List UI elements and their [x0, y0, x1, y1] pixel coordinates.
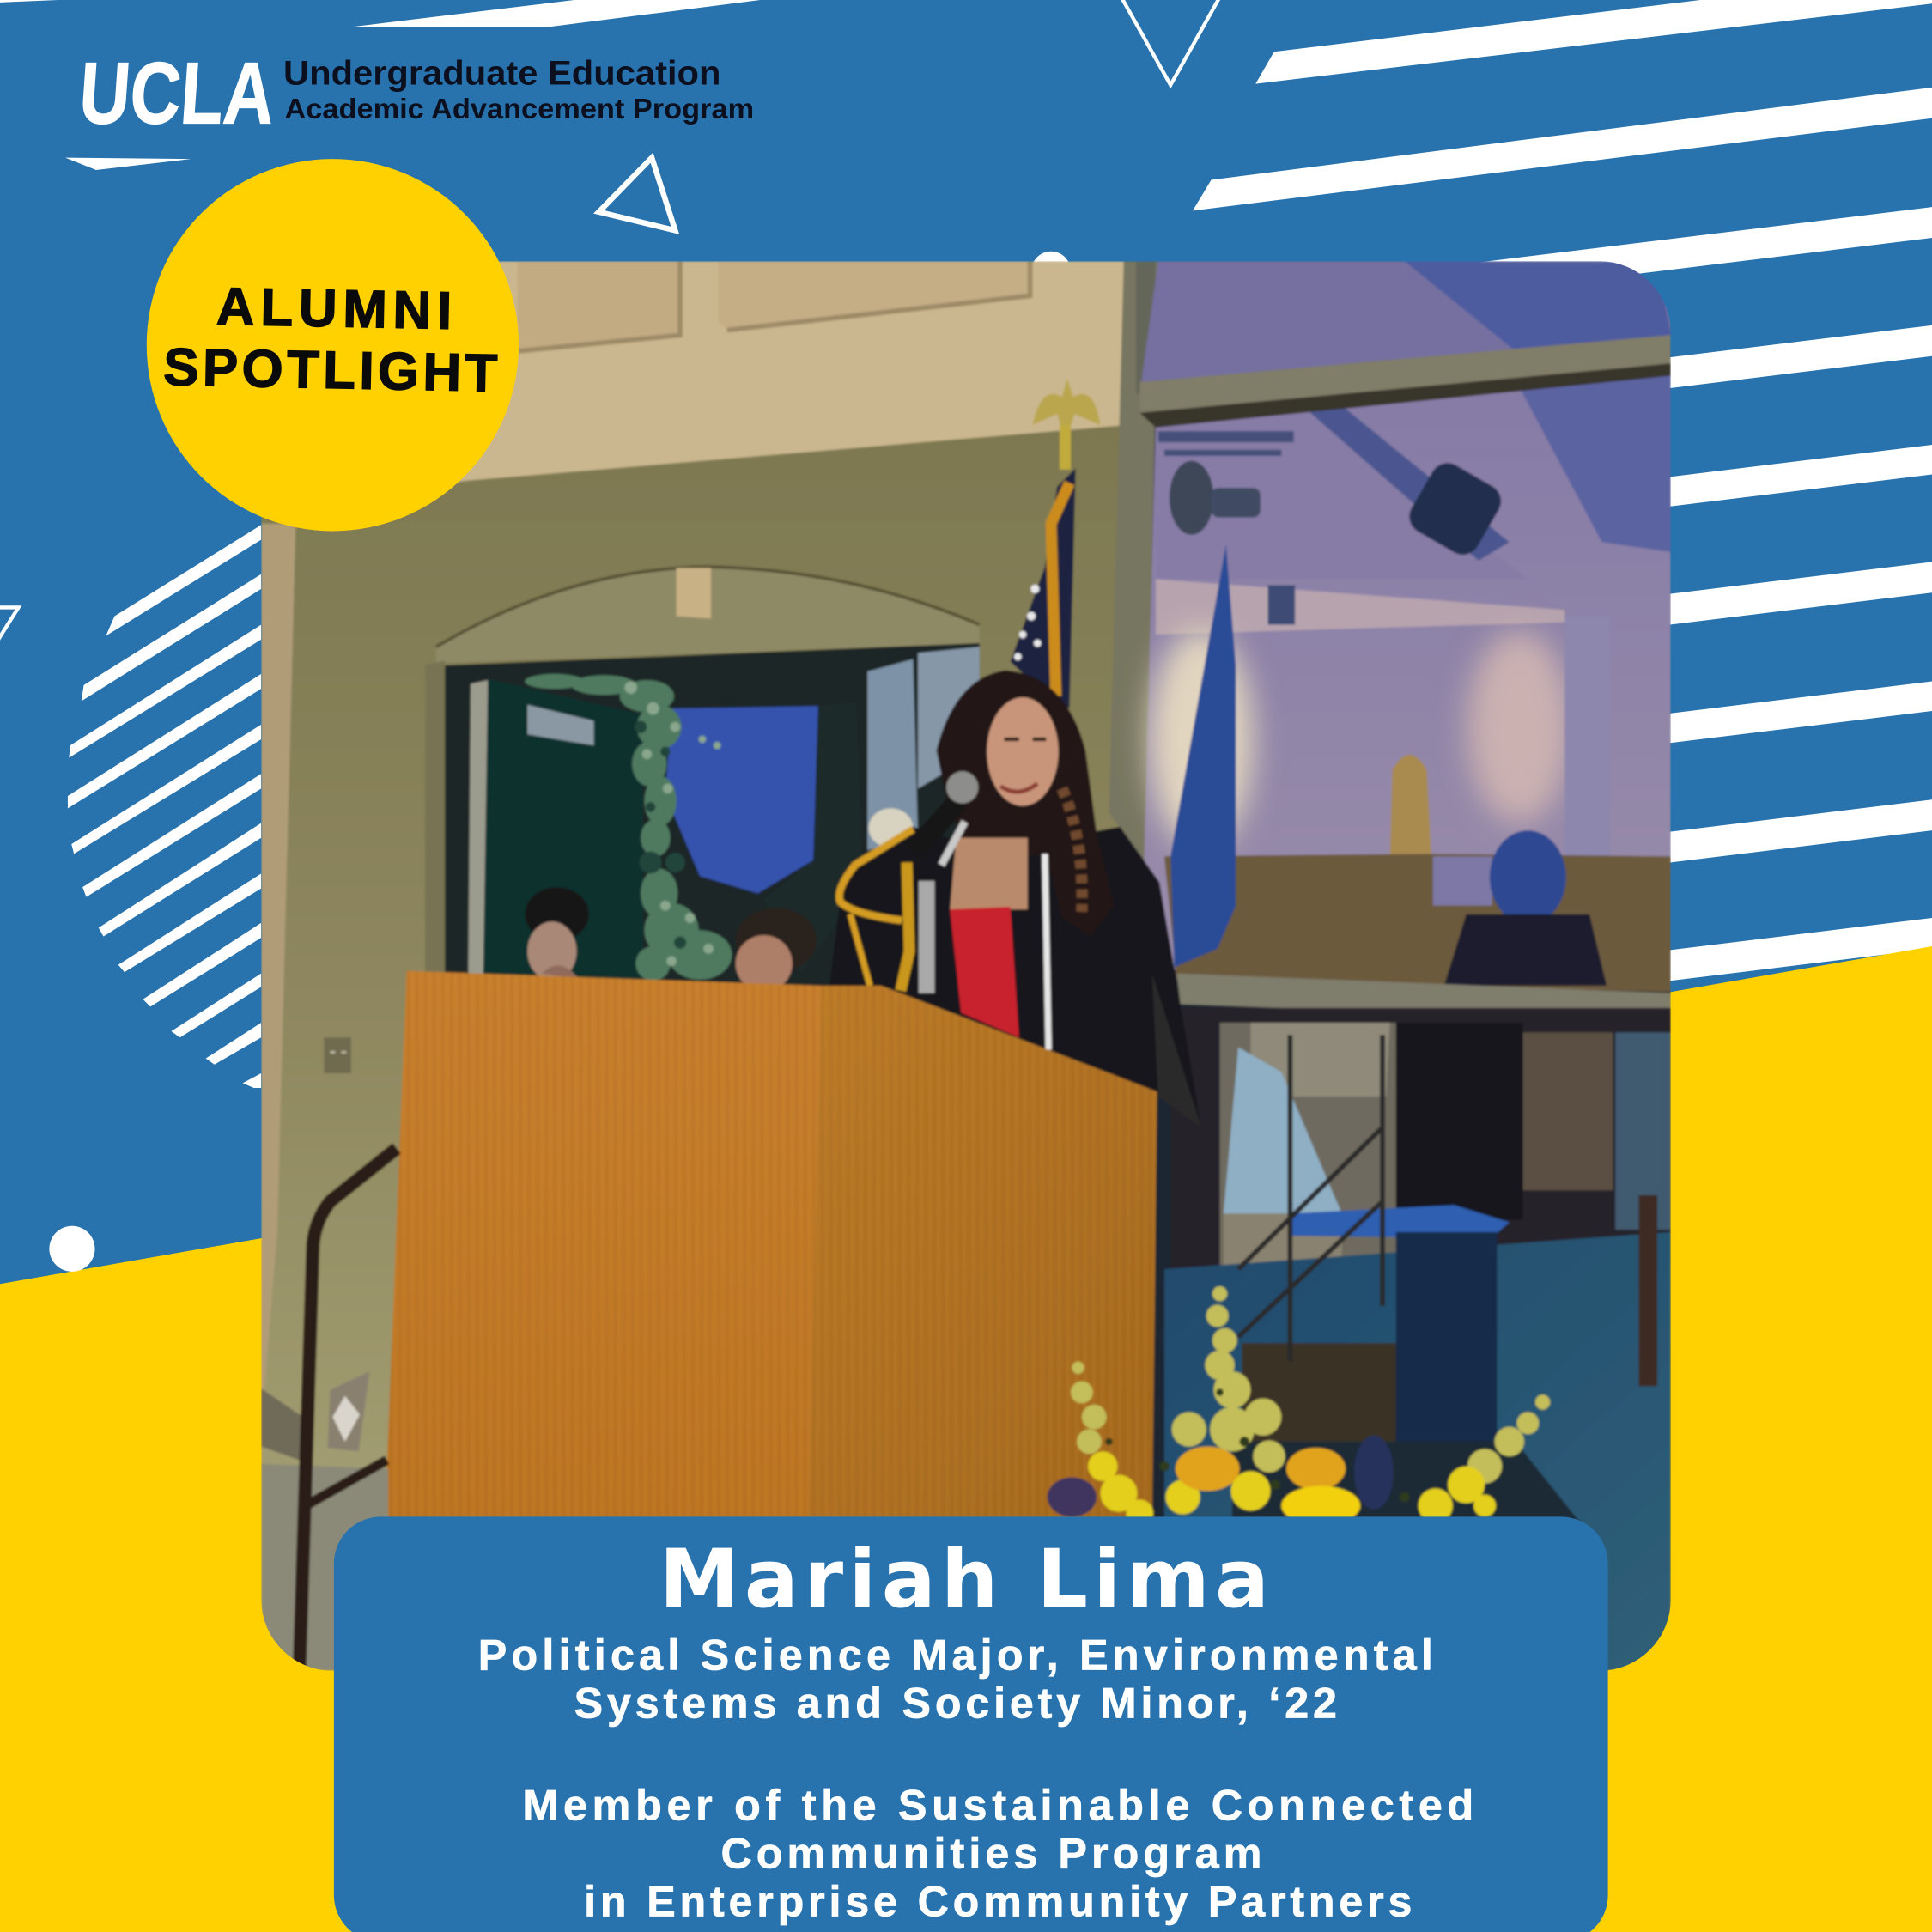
panel: name and program details — [334, 1516, 1608, 1932]
flower arrangement — [1048, 1286, 1550, 1527]
name heading: Mariah Lima — [659, 1532, 1269, 1625]
UCLA logo and program name: Undergraduate Education — [283, 53, 720, 92]
degree text: Systems and Society Minor, ‘22 — [574, 1679, 1337, 1727]
badge heading — [163, 276, 500, 404]
icon: outlined triangle near badge — [598, 158, 675, 230]
icon: white dot behind photo — [1031, 252, 1071, 291]
left hatched circle stripes — [68, 525, 261, 1088]
vine leaves — [525, 674, 732, 981]
UCLA logo and program name — [76, 45, 754, 142]
badge heading: SPOTLIGHT — [163, 337, 498, 404]
UCLA logo and program name: Academic Advancement Program — [284, 93, 754, 125]
yellow diagonal background — [0, 946, 1932, 1932]
membership text — [522, 1781, 1473, 1925]
graduate in black gown — [829, 671, 1201, 1127]
icon: outlined triangle at top — [1119, 0, 1222, 85]
membership text: Communities Program — [720, 1829, 1261, 1877]
UCLA logo and program name: UCLA — [76, 45, 278, 142]
stair railing — [261, 1148, 397, 1671]
degree text — [478, 1631, 1433, 1727]
right hall windows — [1140, 364, 1671, 1516]
wooden podium — [385, 971, 1157, 1528]
top white stripes — [0, 0, 760, 170]
icon: white dot lower left — [49, 1226, 94, 1272]
icon: outlined triangle at left edge — [0, 607, 19, 641]
degree text: Political Science Major, Environmental — [478, 1631, 1433, 1679]
membership text: in Enterprise Community Partners — [584, 1877, 1412, 1925]
right white diagonal stripes — [1193, 0, 1932, 1004]
alumni spotlight badge — [147, 159, 519, 531]
membership text: Member of the Sustainable Connected — [522, 1781, 1473, 1829]
flag with eagle — [1011, 379, 1100, 708]
photo: graduate speaking at podium — [261, 261, 1671, 1671]
badge heading: ALUMNI — [216, 277, 453, 341]
